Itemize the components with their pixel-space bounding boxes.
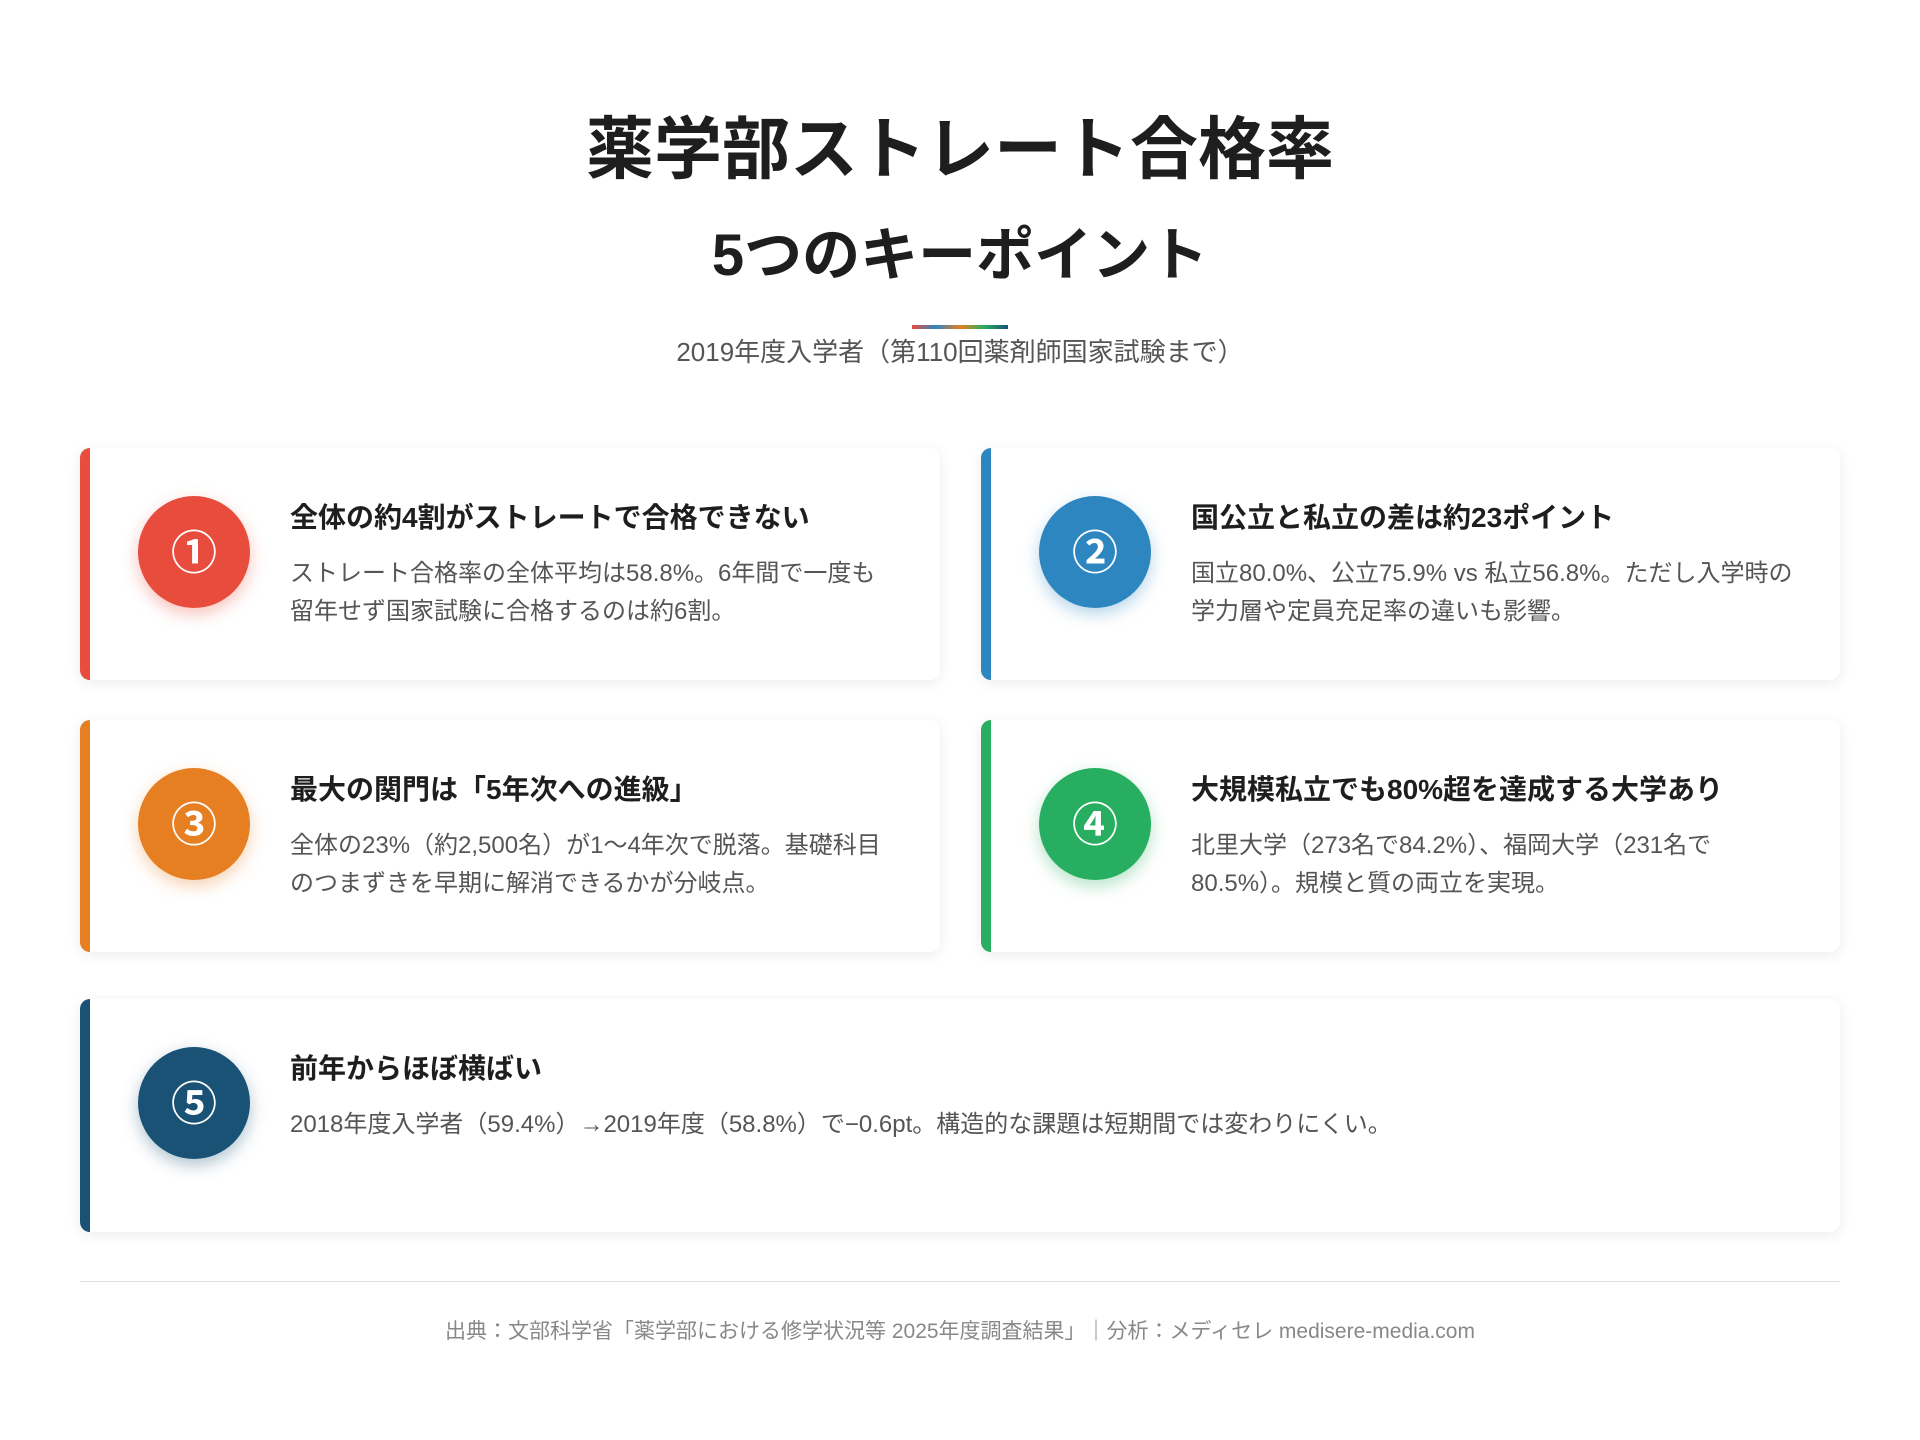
heading 5: 前年からほぼ横ばい <box>290 1053 542 1084</box>
panel: point 2 <box>981 448 1840 680</box>
icon: number 5: ⑤ <box>171 1078 217 1130</box>
footer source: 出典：文部科学省「薬学部における修学状況等 2025年度調査結果」｜分析：メディセレ medisere-media.com <box>445 1320 1475 1343</box>
text 1 <box>290 560 875 625</box>
icon: number 3: ③ <box>171 799 217 851</box>
panel: point 5 <box>80 999 1840 1232</box>
heading 3: 最大の関門は「5年次への進級」 <box>290 774 698 805</box>
panel: point 4 <box>981 720 1840 952</box>
text 3: 全体の23%（約2,500名）が1〜4年次で脱落。基礎科目 <box>290 832 881 859</box>
text 1: ストレート合格率の全体平均は58.8%。6年間で一度も <box>290 560 875 587</box>
text 2: 学力層や定員充足率の違いも影響。 <box>1191 598 1575 625</box>
icon: number 1: ① <box>171 527 217 579</box>
subheading: 2019年度入学者（第110回薬剤師国家試験まで） <box>676 337 1244 367</box>
icon: number 4: ④ <box>1072 799 1118 851</box>
heading 4: 大規模私立でも80%超を達成する大学あり <box>1191 774 1723 805</box>
icon: number 5 <box>138 1047 250 1159</box>
panel: point 3 <box>80 720 940 952</box>
title: 薬学部ストレート合格率 <box>586 112 1334 188</box>
heading 1: 全体の約4割がストレートで合格できない <box>290 502 810 533</box>
text 4: 北里大学（273名で84.2%）、福岡大学（231名で <box>1191 832 1711 859</box>
text 4: 80.5%）。規模と質の両立を実現。 <box>1191 870 1559 897</box>
icon: number 2 <box>1039 496 1151 608</box>
gradient accent bar <box>912 325 1008 329</box>
text 2 <box>1191 560 1792 625</box>
icon: number 4 <box>1039 768 1151 880</box>
text 3 <box>290 832 881 897</box>
icon: number 1 <box>138 496 250 608</box>
text 5: 2018年度入学者（59.4%）→2019年度（58.8%）で−0.6pt。構造的な課題は短期間では変わりにくい。 <box>290 1111 1392 1138</box>
text 2: 国立80.0%、公立75.9% vs 私立56.8%。ただし入学時の <box>1191 560 1792 587</box>
panel: point 1 <box>80 448 940 680</box>
icon: number 3 <box>138 768 250 880</box>
heading 2: 国公立と私立の差は約23ポイント <box>1191 502 1614 533</box>
text 4 <box>1191 832 1711 897</box>
text 1: 留年せず国家試験に合格するのは約6割。 <box>290 598 735 625</box>
text 3: のつまずきを早期に解消できるかが分岐点。 <box>290 870 770 897</box>
subtitle: 5つのキーポイント <box>712 223 1208 288</box>
icon: number 2: ② <box>1072 527 1118 579</box>
